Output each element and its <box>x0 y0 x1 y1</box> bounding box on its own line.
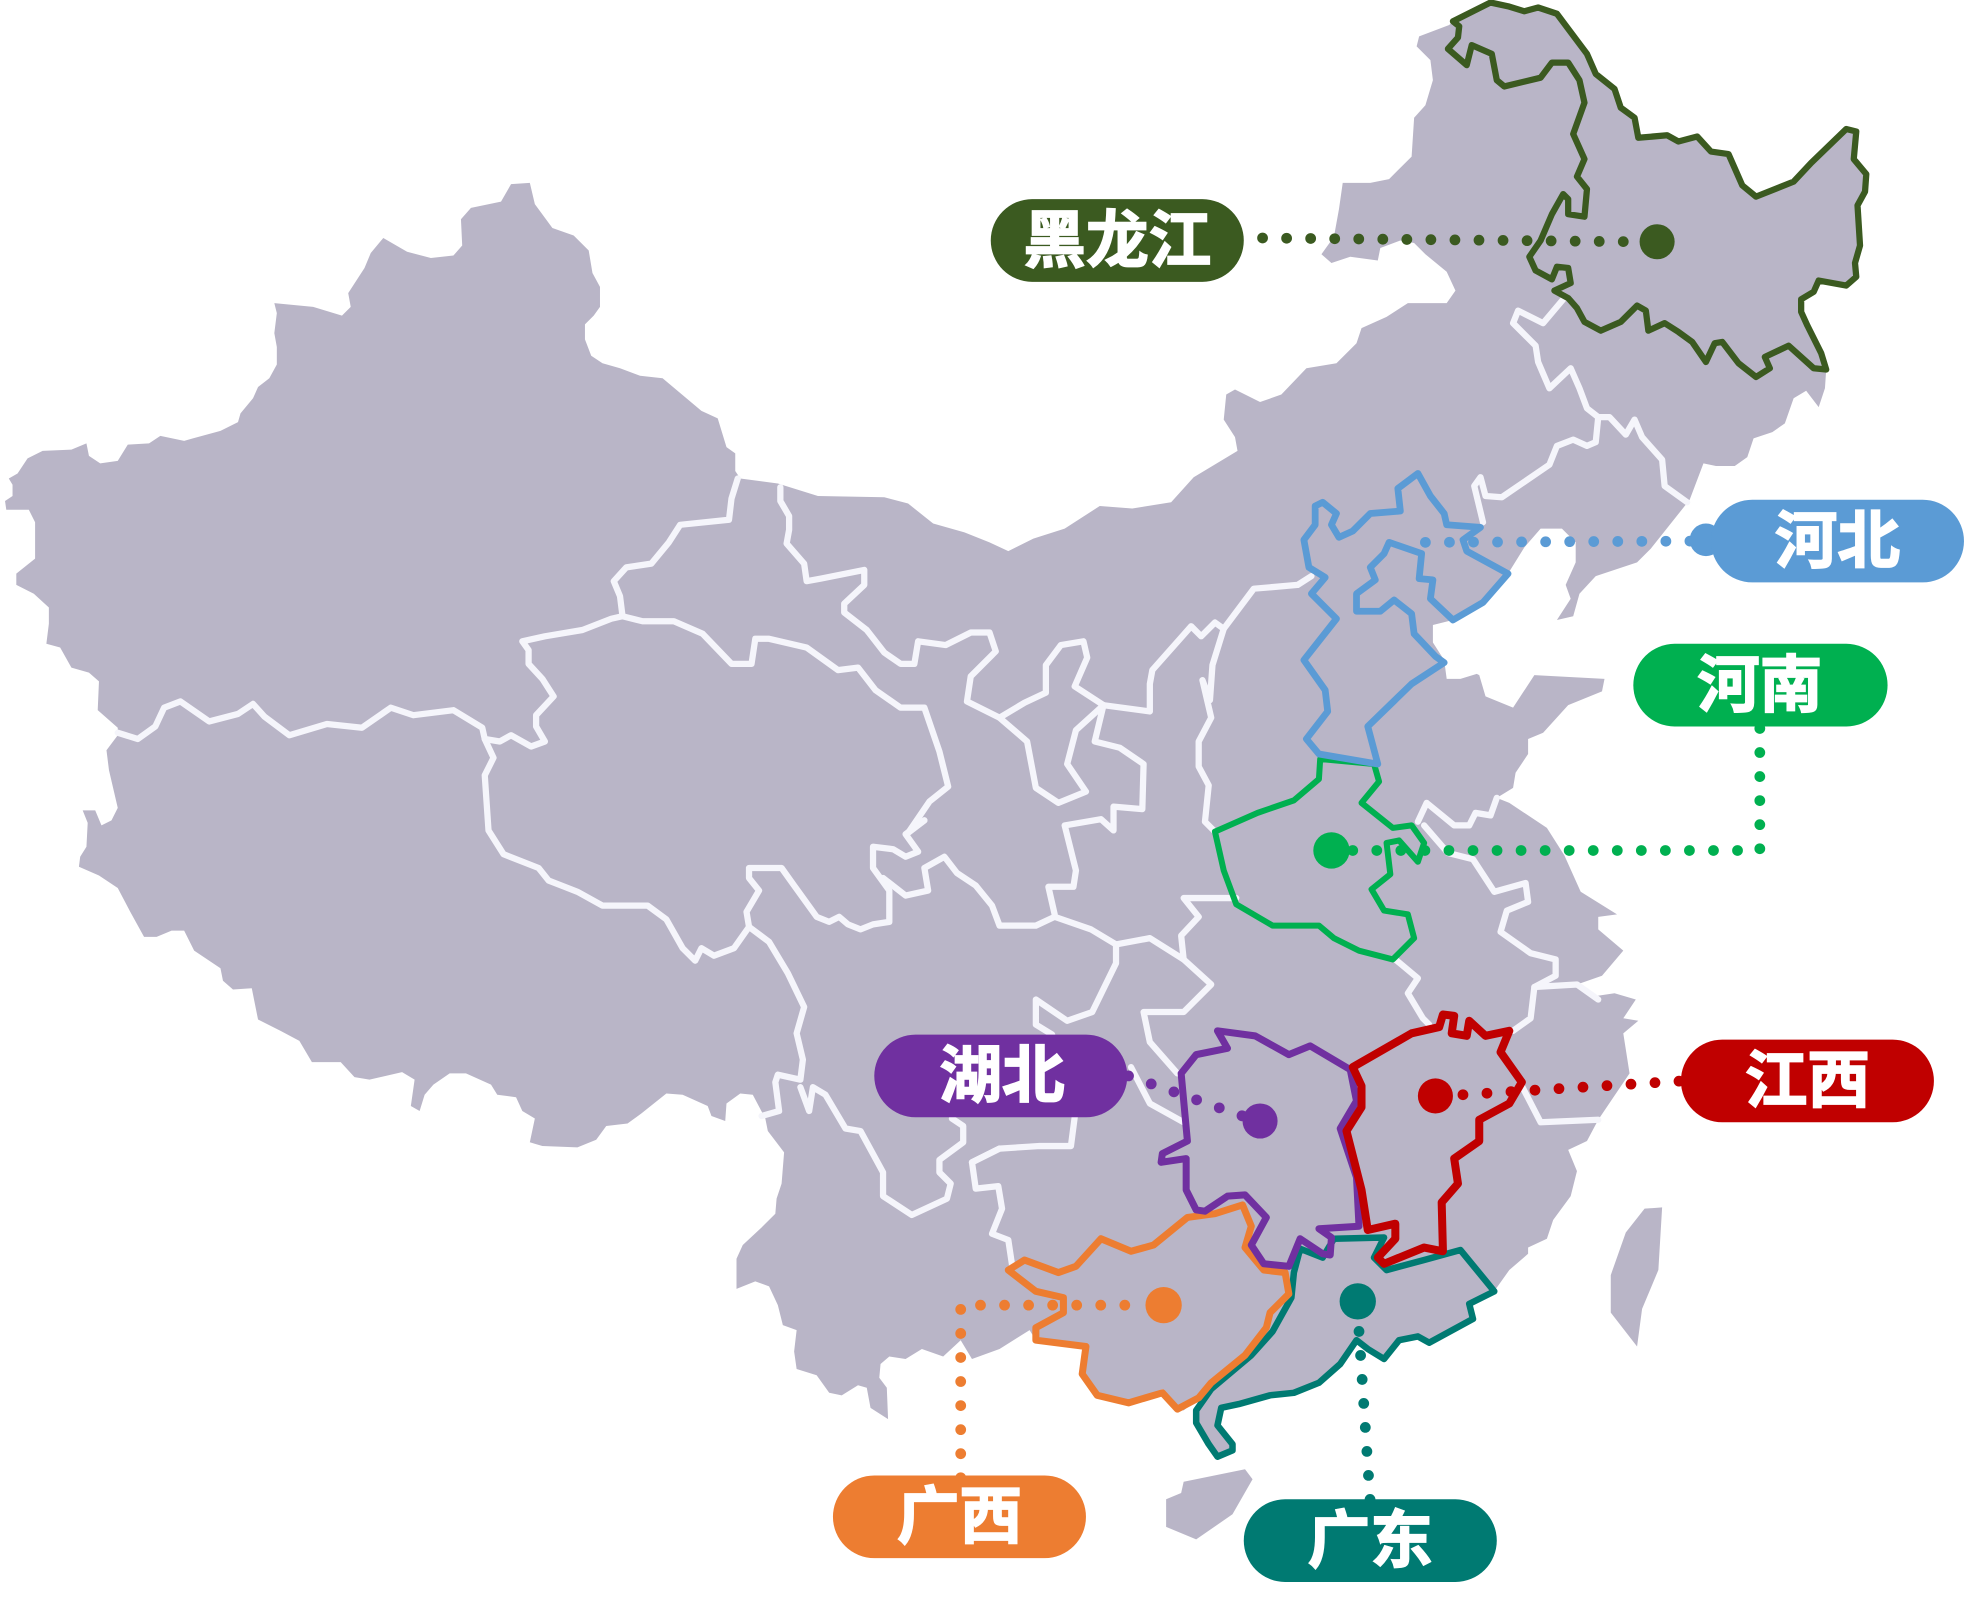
label: Guangxi <box>833 1287 1182 1558</box>
province outline: Guangxi <box>1008 1205 1289 1409</box>
label: Guangdong: 广东 <box>1308 1506 1433 1576</box>
label: Jiangxi: 江西 <box>1745 1046 1870 1116</box>
label: Heilongjiang: 黑龙江 <box>1023 206 1211 276</box>
province outline: Jiangxi <box>1346 1015 1522 1264</box>
label: Hubei <box>874 1035 1278 1139</box>
Taiwan island <box>1611 1207 1662 1346</box>
label: Henan: 河南 <box>1697 650 1822 720</box>
label: Hebei: 河北 <box>1775 506 1900 576</box>
province outline: Hebei <box>1304 473 1508 764</box>
label: Hubei: 湖北 <box>939 1041 1065 1111</box>
province outline: Guangdong <box>1196 1237 1494 1457</box>
label: Heilongjiang <box>991 199 1675 282</box>
province outline: Hubei <box>1161 1031 1359 1266</box>
label: Guangdong <box>1244 1283 1497 1582</box>
label: Guangxi: 广西 <box>897 1482 1022 1552</box>
label: Jiangxi <box>1418 1040 1934 1122</box>
Hainan island <box>1166 1469 1253 1539</box>
province outline: Heilongjiang <box>1448 3 1866 377</box>
label: Henan <box>1313 644 1888 869</box>
province outline: Henan <box>1215 759 1424 959</box>
label: Hebei <box>1425 500 1964 582</box>
white provincial borders <box>118 299 1687 1265</box>
